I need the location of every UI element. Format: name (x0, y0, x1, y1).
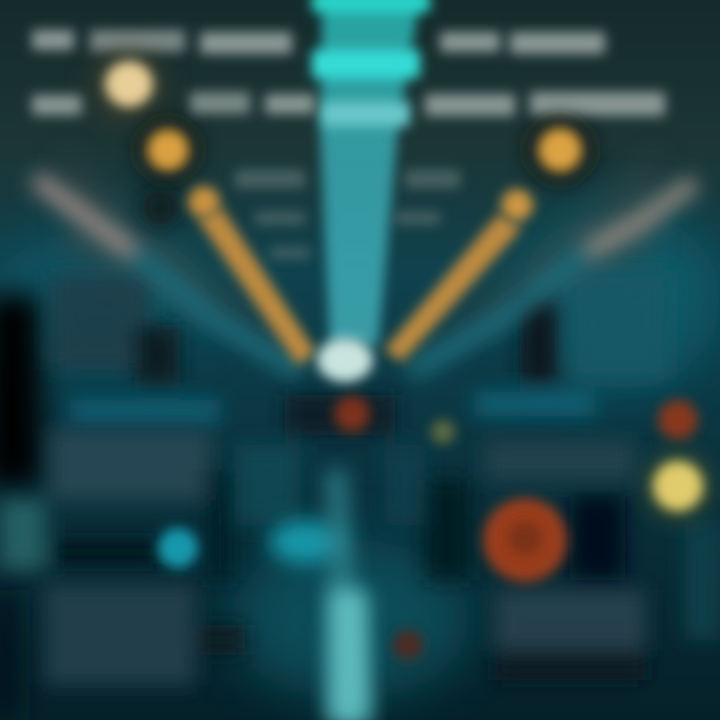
panel: lower right (495, 590, 645, 680)
panel: lower left (45, 585, 245, 685)
central white glow (317, 338, 373, 382)
icon: cyan blob left (158, 528, 198, 568)
panel: middle left (0, 430, 235, 580)
icon: pale gold node (92, 49, 164, 121)
cyan blob centre (269, 520, 341, 564)
central cyan beam (312, 0, 430, 345)
title line 2 (32, 92, 665, 116)
arrow: right gold (384, 214, 522, 362)
icon: right gold node upper (526, 116, 594, 184)
icon: yellow right node (642, 450, 714, 522)
icon: brown lower node (393, 630, 423, 660)
panel: upper right (475, 270, 670, 416)
left pale diagonal line (35, 178, 300, 372)
panel: left dark edge (0, 295, 40, 720)
subtitle lines (235, 170, 460, 258)
panel: central lower dark (235, 395, 425, 525)
lower central beam (324, 470, 375, 720)
icon: red-brown centre node (334, 396, 370, 432)
title line 1 (32, 30, 605, 54)
panel: upper left (50, 275, 220, 422)
right pale diagonal line (410, 182, 695, 372)
icon: left gold node lower (140, 186, 220, 228)
arrow: left gold (198, 208, 316, 366)
icon: small olive node (431, 420, 455, 444)
icon: left gold node upper (136, 118, 200, 182)
icon: right gold node lower (501, 189, 533, 221)
icon: large orange circle (483, 498, 567, 582)
panel: middle right (425, 440, 720, 640)
icon: red-brown right node (658, 400, 698, 440)
